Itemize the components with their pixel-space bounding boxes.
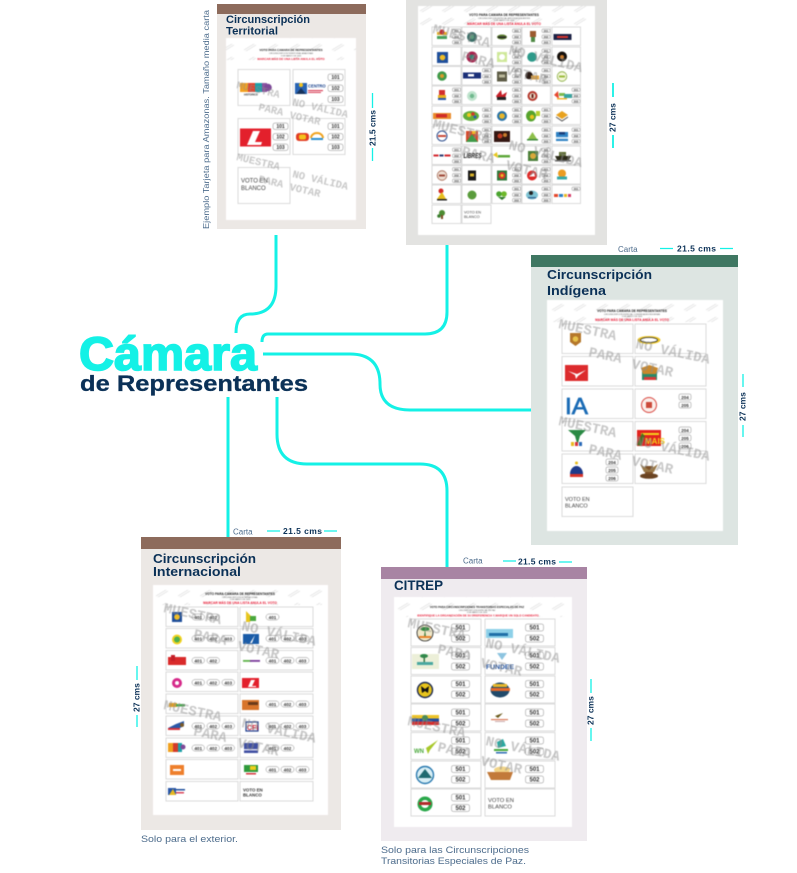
logos: indígena: MAIS bbox=[645, 437, 666, 446]
watermark bbox=[431, 22, 585, 184]
ballot: internacional: 401 bbox=[269, 767, 277, 772]
note: solo para las circunscripciones: Solo para las Circunscripciones bbox=[381, 845, 529, 855]
watermark: VOTAR bbox=[504, 158, 549, 184]
ballot: citrep: 501 bbox=[455, 654, 466, 660]
ballot: grid: 301 bbox=[514, 68, 519, 72]
ballot: citrep: 502 bbox=[455, 750, 466, 756]
ballot: territorial: CIRCUNSCRIPCIÓN TERRITORIAL AMAZONAS bbox=[269, 52, 314, 55]
logo: pacto histórico bbox=[240, 83, 272, 96]
logo: la voz del amazonas bbox=[296, 133, 323, 141]
ballot: grid: 303 bbox=[514, 99, 519, 103]
ballot: citrep: 501 bbox=[529, 711, 540, 717]
ballot: citrep: 502 bbox=[529, 665, 540, 671]
panel: circunscripción internacional bbox=[141, 537, 341, 830]
ballot: internacional: MARCAR MÁS DE UNA LISTA ANULA EL VOTO bbox=[203, 600, 277, 605]
dimension: 27 cms internacional bbox=[132, 666, 142, 727]
ballot: grid: 3 DE MARZO DE 2026 bbox=[494, 19, 515, 22]
ballot: internacional: 403 bbox=[299, 658, 307, 663]
ballot: citrep: 501 bbox=[529, 739, 540, 745]
ballot: internacional: 402 bbox=[209, 658, 217, 663]
dimension: carta 21.5 cms indígena: Carta bbox=[618, 245, 638, 254]
ballot: grid: 301 bbox=[544, 128, 549, 132]
ballot: grid: 303 bbox=[544, 40, 549, 44]
panel: circunscripción indígena bbox=[531, 255, 738, 545]
heading: internacional: Internacional bbox=[153, 564, 241, 579]
ballot: indígena: 205 bbox=[681, 436, 689, 441]
ballot: indígena: CIRCUNSCRIPCIÓN ESPECIAL COMUNIDADES INDÍGENAS bbox=[604, 313, 661, 316]
dimension: carta 21.5 cms citrep bbox=[463, 556, 572, 566]
dimension: carta 21.5 cms citrep: Carta bbox=[463, 556, 483, 566]
ballot: grid: 303 bbox=[544, 139, 549, 143]
watermark: PARA bbox=[436, 740, 473, 763]
ballot: grid: 301 bbox=[514, 187, 519, 191]
ballot: internacional: 402 bbox=[209, 746, 217, 751]
ballot: grid: 302 bbox=[544, 55, 549, 59]
watermark: VOTAR bbox=[288, 110, 322, 129]
voto en blanco cell bbox=[462, 205, 491, 224]
ballot: citrep: 502 bbox=[529, 722, 540, 728]
heading: internacional: Circunscripción bbox=[153, 551, 256, 566]
dimension: 27 cms citrep bbox=[586, 679, 596, 741]
side note: ejemplo tarjeta: Ejemplo Tarjeta para Amazonas. Tamaño media carta bbox=[201, 10, 211, 229]
watermark bbox=[557, 317, 712, 479]
logos: citrep bbox=[412, 625, 515, 812]
ballot: grid: 303 bbox=[454, 179, 459, 183]
ballot: grid: 301 bbox=[574, 128, 579, 132]
watermark: NO VÁLIDA bbox=[484, 732, 562, 766]
ballot: grid: 303 bbox=[514, 119, 519, 123]
dimension: carta 21.5 cms indígena: 21.5 cms bbox=[677, 244, 716, 254]
ballot: internacional: 403 bbox=[224, 680, 232, 685]
ballot: indígena: 205 bbox=[608, 468, 616, 473]
ballot: grid: 302 bbox=[454, 154, 459, 158]
ballot: grid: 301 bbox=[514, 29, 519, 33]
voto en blanco: BLANCO bbox=[488, 804, 512, 810]
ballot: citrep: IDENTIFIQUE LA ORGANIZACIÓN DE SU PREFERENCIA Y MARQUE UN SOLO CANDIDATO bbox=[417, 612, 540, 618]
voto en blanco: BLANCO bbox=[565, 504, 588, 510]
watermark: PARA bbox=[192, 627, 229, 650]
watermark: PARA bbox=[257, 102, 285, 120]
panel: circunscripción territorial: Territorial bbox=[226, 26, 278, 38]
ballot: grid: 301 bbox=[484, 128, 489, 132]
ballot: territorial: 3 DE MARZO DE 2026 bbox=[281, 54, 302, 57]
ballot: internacional: 402 bbox=[284, 724, 292, 729]
ballot: grid: 303 bbox=[574, 139, 579, 143]
ballot: grid: 302 bbox=[544, 74, 549, 78]
ballot: grid: 302 bbox=[544, 193, 549, 197]
ballot: grid: 302 bbox=[514, 193, 519, 197]
ballot: indígena: 3 DE MARZO DE 2026 bbox=[622, 315, 643, 318]
ballot: territorial: 102 bbox=[331, 135, 340, 141]
voto en blanco: VOTO EN bbox=[488, 798, 514, 804]
ballot: grid: 301 bbox=[454, 148, 459, 152]
ballot: grid: 301 bbox=[484, 108, 489, 112]
ballot: grid: 302 bbox=[544, 154, 549, 158]
ballot: indígena: 206 bbox=[681, 444, 689, 449]
title: Cámara bbox=[79, 327, 258, 380]
ballot: citrep: 501 bbox=[529, 767, 540, 773]
watermark bbox=[162, 601, 318, 761]
ballot: grid: 301 bbox=[544, 29, 549, 33]
ballot: grid: 301 bbox=[574, 187, 579, 191]
logo: centro democrático: CENTRO bbox=[308, 84, 326, 88]
ballot: grid: 303 bbox=[574, 99, 579, 103]
ballot: grid bbox=[418, 6, 595, 235]
watermark: MUESTRA bbox=[406, 616, 467, 644]
ballot: grid: 303 bbox=[544, 179, 549, 183]
ballot: grid: VOTO PARA CAMARA DE REPRESENTANTES bbox=[469, 13, 539, 17]
voto en blanco: BLANCO bbox=[243, 792, 262, 798]
ballot: grid: 301 bbox=[574, 88, 579, 92]
ballot: grid: 301 bbox=[514, 88, 519, 92]
watermark: VOTAR bbox=[504, 63, 549, 89]
note: solo para las circunscripciones bbox=[381, 845, 529, 866]
watermark: MUESTRA bbox=[406, 714, 467, 742]
watermark: NO VÁLIDA bbox=[507, 136, 585, 172]
dimension: carta 21.5 cms indígena bbox=[618, 244, 733, 254]
ballot: citrep: 501 bbox=[455, 739, 466, 745]
heading: territorial: Circunscripción bbox=[226, 14, 310, 26]
note: solo para el exterior: Solo para el exterior. bbox=[141, 834, 238, 844]
ballot: grid: 301 bbox=[544, 148, 549, 152]
ballot: internacional: 401 bbox=[194, 636, 202, 641]
heading: indígena: Circunscripción bbox=[547, 267, 652, 282]
watermark: MUESTRA bbox=[557, 414, 618, 442]
dimension: 27 cms internacional: 27 cms bbox=[132, 683, 142, 712]
ballot: territorial: 101 bbox=[276, 124, 285, 130]
ballot: indígena: MARCAR MÁS DE UNA LISTA ANULA EL VOTO bbox=[595, 317, 669, 322]
ballot: grid: 303 bbox=[544, 159, 549, 163]
dimension: carta 21.5 cms citrep: 21.5 cms bbox=[518, 556, 556, 566]
logos: internacional: CFI bbox=[247, 725, 258, 732]
ballot: citrep: 502 bbox=[455, 693, 466, 699]
watermark: VOTAR bbox=[236, 736, 281, 761]
watermark: PARA bbox=[436, 642, 473, 665]
watermark: PARA bbox=[460, 49, 497, 73]
ballot: grid: 302 bbox=[544, 134, 549, 138]
ballot: grid: 302 bbox=[514, 114, 519, 118]
ballot: grid: 303 bbox=[544, 198, 549, 202]
ballot: internacional: 401 bbox=[269, 615, 277, 620]
ballot: grid: 302 bbox=[484, 74, 489, 78]
ballot: citrep: 3 DE MARZO DE 2026 bbox=[467, 611, 488, 614]
voto en blanco: VOTO EN bbox=[565, 497, 590, 503]
ballot: territorial: 103 bbox=[331, 97, 340, 103]
dimension: 27 cms indígena bbox=[738, 374, 748, 437]
watermark: NO VÁLIDA bbox=[507, 41, 585, 77]
ballot: citrep: 501 bbox=[529, 626, 540, 632]
watermark: PARA bbox=[587, 345, 624, 368]
ballot: citrep: CIRCUNSCRIPCIÓN ESPECIAL DE PAZ bbox=[459, 609, 496, 612]
logos: indígena: IA bbox=[565, 393, 589, 419]
watermark: VOTAR bbox=[236, 639, 281, 664]
ballot: grid: 302 bbox=[514, 94, 519, 98]
watermark: MUESTRA bbox=[235, 152, 281, 174]
ballot: grid: 303 bbox=[514, 80, 519, 84]
ballot: grid: LIBRES bbox=[464, 153, 482, 160]
ballot: territorial: MARCAR MAS DE UNA LISTA ANULA EL VOTO bbox=[257, 57, 325, 61]
ballot: grid: 303 bbox=[484, 119, 489, 123]
watermark: NO VÁLIDA bbox=[240, 617, 318, 651]
ballot: citrep bbox=[394, 597, 572, 827]
logos: indígena bbox=[565, 333, 666, 479]
ballot: grid: 301 bbox=[544, 167, 549, 171]
ballot: internacional: 401 bbox=[269, 702, 277, 707]
logos: citrep: FUNDEE bbox=[486, 664, 515, 671]
ballot: internacional: 402 bbox=[209, 636, 217, 641]
ballot: citrep: 502 bbox=[455, 806, 466, 812]
ballot: internacional: CIRCUNSCRIPCIÓN INTERNACIONAL bbox=[222, 596, 259, 599]
ballot: citrep: 501 bbox=[455, 626, 466, 632]
dimension: 21.5 cms territorial bbox=[368, 93, 378, 161]
ballot: territorial: VOTO PARA CAMARA DE REPRESENTANTES bbox=[259, 48, 323, 52]
watermark bbox=[406, 616, 562, 779]
voto en blanco cell: BLANCO bbox=[464, 215, 480, 219]
ballot: internacional: 401 bbox=[194, 680, 202, 685]
watermark: MUESTRA bbox=[557, 317, 618, 345]
ballot: grid: 302 bbox=[514, 173, 519, 177]
logos: internacional bbox=[168, 611, 260, 795]
ballot: grid: 303 bbox=[454, 159, 459, 163]
ballot: grid: 303 bbox=[514, 60, 519, 64]
heading: indígena: Indígena bbox=[547, 283, 607, 298]
watermark bbox=[235, 80, 350, 201]
ballot: grid: 302 bbox=[544, 173, 549, 177]
ballot: grid: 301 bbox=[514, 108, 519, 112]
ballot: internacional: 403 bbox=[299, 636, 307, 641]
dimension: 27 cms grid ballot: 27 cms bbox=[608, 103, 618, 132]
ballot: grid: MARCAR MÁS DE UNA LISTA ANULA EL VOTO bbox=[467, 21, 541, 26]
ballot: internacional: 401 bbox=[194, 724, 202, 729]
voto en blanco: BLANCO bbox=[241, 186, 266, 192]
ballot: internacional: 401 bbox=[269, 724, 277, 729]
ballot: internacional: 401 bbox=[194, 746, 202, 751]
ballot: grid: 301 bbox=[514, 167, 519, 171]
watermark: PARA bbox=[460, 144, 497, 168]
ballot: citrep: 501 bbox=[455, 796, 466, 802]
watermark: VOTAR bbox=[479, 656, 524, 681]
dimension: 27 cms grid ballot bbox=[608, 83, 618, 148]
ballot: territorial: 103 bbox=[331, 145, 340, 151]
ballot: citrep: 502 bbox=[529, 637, 540, 643]
ballot: citrep: 501 bbox=[455, 711, 466, 717]
dimension: carta 21.5 cms internacional bbox=[233, 526, 337, 536]
ballot: grid: 302 bbox=[514, 74, 519, 78]
ballot: citrep: 502 bbox=[529, 693, 540, 699]
panel: ballot nacional 27 cms bbox=[406, 0, 607, 245]
ballot: internacional: 403 bbox=[224, 746, 232, 751]
watermark: VOTAR bbox=[479, 754, 524, 779]
ballot: internacional: 3 DE MARZO DE 2026 bbox=[230, 598, 251, 601]
ballot: citrep: 502 bbox=[455, 665, 466, 671]
ballot: internacional: 402 bbox=[284, 767, 292, 772]
dimension: 27 cms indígena: 27 cms bbox=[738, 392, 748, 421]
ballot: internacional bbox=[153, 585, 328, 815]
watermark: NO VÁLIDA bbox=[291, 167, 350, 194]
ballot: territorial: 102 bbox=[331, 86, 340, 92]
ballot: internacional: 402 bbox=[209, 680, 217, 685]
ballot: internacional: 402 bbox=[284, 636, 292, 641]
ballot: grid: 302 bbox=[574, 94, 579, 98]
ballot: grid: 301 bbox=[544, 68, 549, 72]
ballot: indígena: 204 bbox=[608, 460, 616, 465]
ballot: internacional: 402 bbox=[209, 615, 217, 620]
ballot: grid: 301 bbox=[454, 88, 459, 92]
ballot: indígena: VOTO PARA CAMARA DE REPRESENTANTES bbox=[597, 309, 667, 313]
note: solo para las circunscripciones: Transitorias Especiales de Paz. bbox=[381, 856, 526, 866]
ballot: grid: 302 bbox=[454, 173, 459, 177]
dimension: 21.5 cms territorial: 21.5 cms bbox=[368, 110, 378, 146]
panel: circunscripción territorial bbox=[217, 4, 366, 229]
ballot: internacional: 403 bbox=[224, 724, 232, 729]
ballot: grid: 303 bbox=[544, 119, 549, 123]
ballot: territorial bbox=[226, 38, 356, 220]
voto en blanco: VOTO EN bbox=[243, 788, 263, 792]
ballot: grid: 302 bbox=[454, 35, 459, 39]
ballot: grid: 301 bbox=[514, 49, 519, 53]
dimension: 27 cms citrep: 27 cms bbox=[586, 696, 596, 725]
watermark: VOTAR bbox=[630, 454, 675, 479]
ballot: internacional: 401 bbox=[269, 746, 277, 751]
ballot: citrep: 501 bbox=[455, 767, 466, 773]
panel: citrep bbox=[381, 567, 587, 841]
voto en blanco: VOTO EN bbox=[241, 178, 268, 184]
ballot: citrep: VOTO PARA CIRCUNSCRIPCIONES TRANSITORIAS ESPECIALES DE PAZ bbox=[430, 605, 525, 609]
ballot: citrep: 502 bbox=[529, 750, 540, 756]
ballot: citrep: 502 bbox=[455, 722, 466, 728]
ballot: grid: 301 bbox=[544, 187, 549, 191]
ballot: citrep: 501 bbox=[455, 682, 466, 688]
ballot: grid: 301 bbox=[544, 108, 549, 112]
watermark: NO VÁLIDA bbox=[634, 335, 712, 369]
ballot: indígena: 204 bbox=[681, 428, 689, 433]
ballot: grid: 301 bbox=[454, 167, 459, 171]
title bbox=[79, 327, 308, 396]
logos: citrep: WN bbox=[414, 749, 424, 755]
ballot: grid: 303 bbox=[514, 40, 519, 44]
heading: internacional bbox=[153, 551, 256, 579]
ballot: grid: 301 bbox=[454, 29, 459, 33]
ballot: internacional: 403 bbox=[224, 636, 232, 641]
ballot: grid: 302 bbox=[544, 114, 549, 118]
watermark: PARA bbox=[192, 724, 229, 747]
ballot: internacional: 402 bbox=[284, 746, 292, 751]
title: de Representantes bbox=[80, 371, 308, 396]
ballot: grid: 302 bbox=[484, 114, 489, 118]
ballot: grid: 303 bbox=[514, 198, 519, 202]
watermark: MUESTRA bbox=[162, 601, 223, 629]
ballot: internacional: 402 bbox=[284, 658, 292, 663]
ballot: territorial: 102 bbox=[276, 135, 285, 141]
ballot: grid: 303 bbox=[454, 40, 459, 44]
ballot: territorial: 103 bbox=[276, 145, 285, 151]
watermark: NO VÁLIDA bbox=[634, 432, 712, 466]
heading: indígena bbox=[547, 267, 652, 298]
ballot: internacional: 401 bbox=[194, 615, 202, 620]
ballot: internacional: 402 bbox=[209, 724, 217, 729]
ballot: internacional: 401 bbox=[194, 658, 202, 663]
watermark: PARA bbox=[587, 442, 624, 465]
ballot: grid: 303 bbox=[544, 60, 549, 64]
connector lines bbox=[228, 235, 532, 568]
ballot: internacional: VOTO PARA CAMARA DE REPRESENTANTES bbox=[205, 592, 275, 596]
ballot: internacional: 402 bbox=[284, 702, 292, 707]
watermark: VOTAR bbox=[288, 182, 322, 201]
logo: pacto histórico: HISTORICO bbox=[244, 94, 258, 96]
ballot: internacional: 403 bbox=[299, 767, 307, 772]
ballot: citrep: 501 bbox=[529, 682, 540, 688]
ballot: territorial: 101 bbox=[331, 124, 340, 130]
logo: partido liberal bbox=[240, 128, 271, 146]
ballot: internacional: 401 bbox=[269, 636, 277, 641]
ballot: grid: CIRCUNSCRIPCIÓN ESPECIAL AFRODESCENDIENTES bbox=[478, 17, 531, 20]
ballot: indígena bbox=[547, 300, 723, 531]
logo: centro democrático bbox=[295, 83, 326, 94]
watermark: VOTAR bbox=[630, 357, 675, 382]
ballot: grid: 302 bbox=[514, 55, 519, 59]
watermark: NO VÁLIDA bbox=[240, 714, 318, 748]
ballot: grid: 303 bbox=[544, 80, 549, 84]
dimension: carta 21.5 cms internacional: Carta bbox=[233, 528, 253, 536]
ballot: indígena: 204 bbox=[681, 395, 689, 400]
watermark: MUESTRA bbox=[235, 80, 281, 102]
ballot: citrep: 502 bbox=[455, 637, 466, 643]
watermark: NO VÁLIDA bbox=[484, 634, 562, 668]
watermark: PARA bbox=[257, 174, 285, 192]
ballot: grid: 303 bbox=[454, 99, 459, 103]
ballot: grid: 303 bbox=[484, 80, 489, 84]
ballot: grid: 302 bbox=[454, 94, 459, 98]
ballot: grid: 302 bbox=[514, 35, 519, 39]
ballot: territorial: 101 bbox=[331, 75, 340, 81]
ballot: internacional: 403 bbox=[299, 724, 307, 729]
watermark: MUESTRA bbox=[162, 698, 223, 726]
dimension: carta 21.5 cms internacional: 21.5 cms bbox=[283, 526, 322, 536]
ballot: grid: 302 bbox=[574, 134, 579, 138]
ballot: indígena: 206 bbox=[608, 476, 616, 481]
ballot: grid: 302 bbox=[484, 134, 489, 138]
ballot: citrep: 502 bbox=[529, 778, 540, 784]
heading: citrep: CITREP bbox=[394, 577, 443, 593]
ballot: indígena: 205 bbox=[681, 403, 689, 408]
voto en blanco cell: VOTO EN bbox=[464, 210, 481, 214]
ballot: grid: 302 bbox=[544, 35, 549, 39]
ballot: grid: 303 bbox=[514, 179, 519, 183]
ballot: grid: 301 bbox=[544, 49, 549, 53]
ballot: citrep: 502 bbox=[455, 778, 466, 784]
ballot: grid: 301 bbox=[484, 68, 489, 72]
watermark: NO VÁLIDA bbox=[291, 95, 350, 122]
ballot: citrep: 501 bbox=[529, 654, 540, 660]
ballot: internacional: 403 bbox=[299, 702, 307, 707]
ballot: internacional: 401 bbox=[269, 658, 277, 663]
watermark: MUESTRA bbox=[431, 22, 492, 52]
watermark: MUESTRA bbox=[431, 117, 492, 147]
ballot: grid: 303 bbox=[484, 139, 489, 143]
